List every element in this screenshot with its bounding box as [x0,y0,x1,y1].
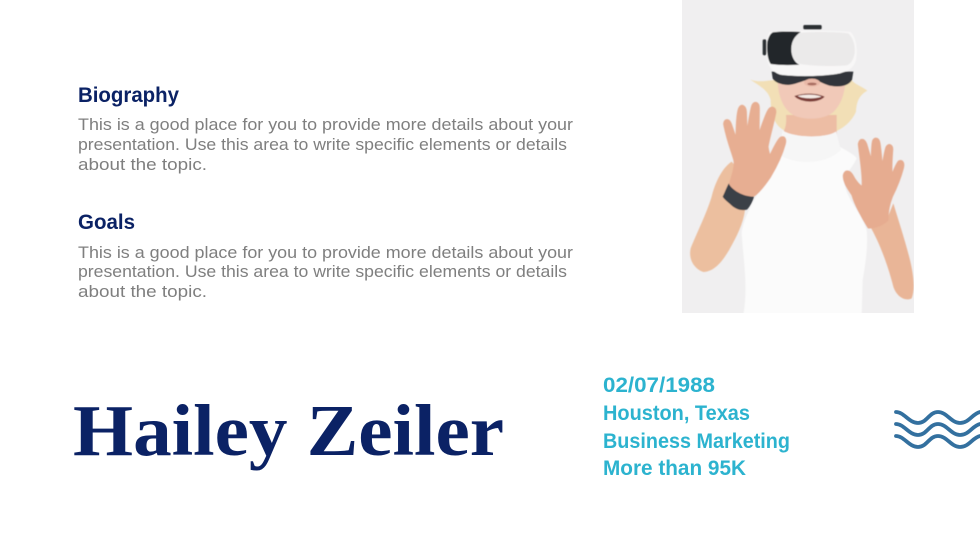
text block: goals: about the topic. [78,282,207,301]
headset front [792,32,855,66]
headset mask [772,72,853,86]
headset black panel [767,32,801,65]
text block: goals: This is a good place for you to provide more details about your [78,243,573,262]
text block: biography: about the topic. [78,155,207,174]
text block: goals: presentation. Use this area to write specific elements or details [78,262,567,281]
watch [723,183,754,210]
headset tabs [763,39,766,55]
headset body [766,30,857,76]
heading: biography: Biography [78,84,179,107]
text block: biography: presentation. Use this area to write specific elements or details [78,135,567,154]
text block: biography [78,115,573,174]
text block: biography: This is a good place for you to provide more details about your [78,115,573,134]
neck [783,115,837,138]
left arm [690,162,747,272]
title: name: Hailey Zeiler [73,390,504,471]
text block: personal details: 02/07/1988 [603,374,715,397]
right hand [844,139,903,227]
hair [750,78,867,132]
text block: goals [78,243,573,301]
left hand [724,103,785,196]
text block: personal details [603,374,790,480]
text block: personal details: Business Marketing [603,430,790,453]
nose [804,79,820,87]
icon: waves [896,412,980,447]
text block: personal details: Houston, Texas [603,402,750,425]
right arm [869,203,914,299]
slide content [74,0,980,475]
photo: woman wearing VR headset [682,0,914,315]
collar [780,131,841,162]
text block: personal details: More than 95K [603,457,746,480]
heading: goals: Goals [78,211,135,234]
mouth [794,94,825,102]
top [742,148,867,313]
face [778,78,846,119]
